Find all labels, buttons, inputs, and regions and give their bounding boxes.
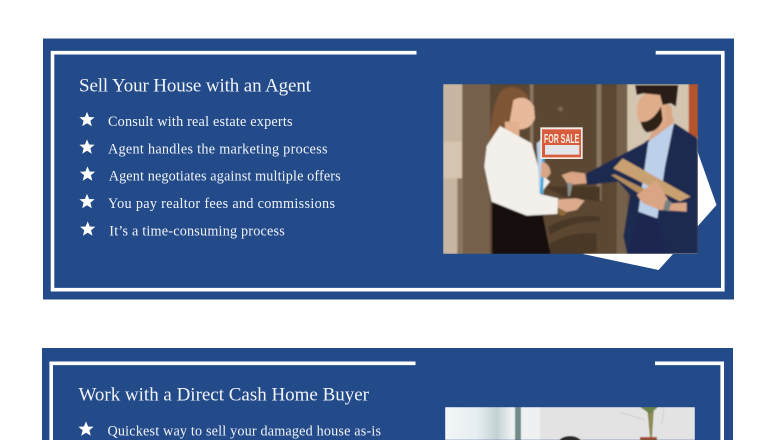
list item 4: You pay realtor fees and commissions [108,196,335,212]
inner frame [51,363,722,440]
heading: sell your house with an agent: Sell Your House with an Agent [79,76,312,97]
for sale sign: FOR SALE [544,132,579,146]
list item 5: It’s a time-consuming process [109,223,285,239]
list item 1: Consult with real estate experts [108,114,293,130]
woman [489,87,528,140]
inner frame [52,53,723,290]
photo: agent handing keys at door [443,84,698,254]
heading: work with a direct cash home buyer: Work with a Direct Cash Home Buyer [78,385,370,406]
list item 2: Agent handles the marketing process [108,142,328,158]
bullet list: agent [79,112,341,239]
list item: quickest way: Quickest way to sell your damaged house as-is [108,423,381,439]
panel: sell with an agent [43,38,734,300]
man [587,123,698,254]
for sale sign [540,127,583,159]
photo: bright room with plant [445,407,695,440]
list item 3: Agent negotiates against multiple offers [109,169,341,185]
panel: direct cash home buyer [42,348,733,440]
decorative white shard behind photo [583,150,716,270]
